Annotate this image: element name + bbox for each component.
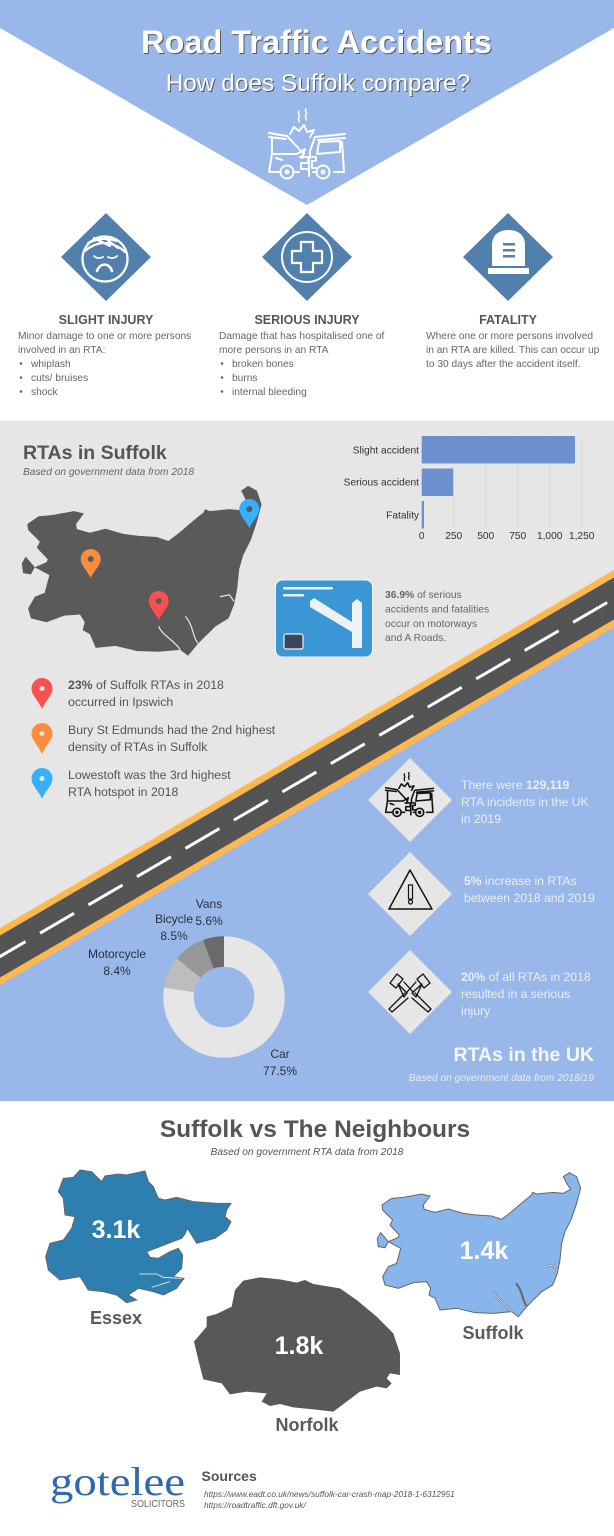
- donut chart: vehicle types: 8.5%: [160, 929, 188, 943]
- road: [0, 570, 614, 985]
- text block: slight injury: shock: [31, 387, 59, 398]
- bar chart: RTAs by severity: 250: [445, 531, 463, 542]
- map: Essex: Essex: [90, 1308, 142, 1328]
- text block: serious injury: burns: [232, 373, 257, 384]
- header banner: [0, 0, 614, 205]
- bar chart: RTAs by severity: Slight accident: [353, 446, 419, 456]
- icon: bandaged face: [61, 213, 151, 301]
- text: UK incident count: in 2019: [461, 812, 501, 826]
- donut chart: vehicle types: [88, 897, 297, 1078]
- text: Ipswich: 23% of Suffolk RTAs in 2018: [68, 678, 224, 692]
- text: Lowestoft: RTA hotspot in 2018: [68, 785, 178, 799]
- text block: slight injury: whiplash: [30, 359, 71, 370]
- icon: warning triangle: [368, 852, 452, 936]
- sources: https://roadtraffic.dft.gov.uk/: [204, 1500, 307, 1510]
- title: Road Traffic Accidents: [141, 24, 492, 60]
- text: serious injury statistic: resulted in a serious: [461, 987, 570, 1001]
- donut chart: vehicle types: Car: [270, 1047, 290, 1061]
- icon: crutches: [368, 950, 452, 1034]
- donut chart: vehicle types: 8.4%: [103, 964, 131, 978]
- logo: Gotelee Solicitors: SOLICITORS: [131, 1499, 185, 1510]
- logo: Gotelee Solicitors: gotelee: [50, 1459, 185, 1504]
- donut chart: vehicle types: 77.5%: [263, 1064, 297, 1078]
- text: increase statistic: between 2018 and 2019: [464, 891, 595, 905]
- text: UK incident count: RTA incidents in the UK: [461, 795, 589, 809]
- text block: fatality: to 30 days after the accident itself.: [426, 359, 581, 370]
- text block: fatality: Where one or more persons involved: [426, 331, 593, 342]
- text: Bury St Edmunds: density of RTAs in Suffolk: [68, 740, 208, 754]
- text block: serious injury: more persons in an RTA: [219, 345, 329, 356]
- map: Essex: [46, 1170, 231, 1328]
- map: Essex: 3.1k: [92, 1216, 140, 1244]
- text block: serious injury: internal bleeding: [232, 387, 307, 398]
- text block: slight injury: cuts/ bruises: [31, 373, 88, 384]
- panel: UK incidents: [368, 758, 595, 1084]
- text: Bury St Edmunds: Bury St Edmunds had the 2nd highest: [68, 723, 276, 737]
- bar chart: RTAs by severity: 1,250: [569, 531, 595, 542]
- map: Suffolk with pins: [22, 486, 262, 656]
- text: neighbours data note: Based on government RTA data from 2018: [211, 1147, 404, 1158]
- text: Ipswich: occurred in Ipswich: [68, 695, 173, 709]
- text: motorway statistic: accidents and fatalities: [385, 604, 489, 616]
- heading: RTAs in the UK: RTAs in the UK: [454, 1044, 594, 1066]
- text block: fatality: in an RTA are killed. This can occur up: [426, 345, 600, 356]
- text: serious injury statistic: injury: [461, 1004, 491, 1018]
- bar chart: RTAs by severity: 500: [477, 531, 495, 542]
- heading: serious injury: SERIOUS INJURY: [254, 313, 360, 327]
- text: increase statistic: 5% increase in RTAs: [464, 874, 577, 888]
- icon: gravestone: [463, 213, 553, 301]
- icon: motorway sign: [276, 580, 372, 657]
- map: Norfolk: 1.8k: [275, 1332, 323, 1360]
- bar chart: RTAs by severity: 750: [509, 531, 527, 542]
- donut chart: vehicle types: Bicycle: [155, 912, 193, 926]
- map: Suffolk: Suffolk: [462, 1323, 524, 1343]
- donut chart: vehicle types: 5.6%: [195, 914, 223, 928]
- icon: red pin: [149, 591, 169, 620]
- legend: Suffolk hotspots: [32, 678, 276, 799]
- text: Suffolk data note: Based on government data from 2018: [23, 467, 194, 478]
- icon: car crash black: [368, 758, 452, 842]
- text block: serious injury: Damage that has hospitalised one of: [219, 331, 385, 342]
- icon: blue legend pin: [32, 768, 52, 799]
- icon: blue pin: [239, 499, 259, 528]
- icon: red legend pin: [32, 678, 52, 709]
- text block: serious injury: [219, 331, 385, 398]
- text: UK data note: Based on government data from 2018/19: [409, 1073, 594, 1084]
- text block: slight injury: involved in an RTA:: [18, 345, 105, 356]
- panel: serious injury: [219, 213, 385, 398]
- bar chart: RTAs by severity: 0: [419, 531, 425, 542]
- panel: slight injury: [18, 213, 191, 398]
- text block: slight injury: Minor damage to one or more persons: [18, 331, 191, 342]
- map: Suffolk: [377, 1173, 581, 1343]
- text: serious injury statistic: 20% of all RTAs in 2018: [461, 970, 591, 984]
- icon: orange pin: [81, 549, 101, 578]
- text block: fatality: [426, 331, 600, 370]
- icon: orange legend pin: [32, 723, 52, 754]
- text: UK incident count: There were 129,119: [461, 778, 569, 792]
- bar chart: RTAs by severity: Serious accident: [344, 478, 419, 488]
- donut chart: vehicle types: Vans: [196, 897, 222, 911]
- heading: Suffolk vs The Neighbours: Suffolk vs The Neighbours: [160, 1116, 470, 1143]
- map: Suffolk: 1.4k: [460, 1237, 508, 1265]
- sources: Sources: [202, 1468, 257, 1484]
- text: Lowestoft: Lowestoft was the 3rd highest: [68, 768, 231, 782]
- panel: blue UK background: [0, 421, 614, 1101]
- sources: [202, 1468, 455, 1510]
- heading: fatality: FATALITY: [479, 313, 538, 327]
- heading: slight injury: SLIGHT INJURY: [59, 313, 154, 327]
- bar chart: RTAs by severity: Fatality: [386, 510, 420, 522]
- text: motorway statistic: and A Roads.: [385, 633, 446, 644]
- icon: car crash white: [269, 109, 345, 178]
- text block: slight injury: [18, 331, 191, 398]
- panel: fatality: [426, 213, 600, 370]
- icon: medical cross: [262, 213, 352, 301]
- text block: serious injury: broken bones: [232, 359, 294, 370]
- text: motorway statistic: occur on motorways: [385, 619, 477, 630]
- bar chart: RTAs by severity: 1,000: [537, 531, 563, 542]
- sources: https://www.eadt.co.uk/news/suffolk-car-crash-map-2018-1-6312951: [204, 1489, 455, 1499]
- panel: grey Suffolk background: [0, 421, 614, 935]
- bar chart: RTAs by severity: [344, 435, 595, 542]
- text: motorway statistic: 36.9% of serious: [385, 590, 462, 601]
- donut chart: vehicle types: Motorcycle: [88, 947, 146, 961]
- map: Norfolk: [194, 1277, 400, 1435]
- map: Norfolk: Norfolk: [276, 1415, 339, 1435]
- heading: RTAs in Suffolk: RTAs in Suffolk: [23, 442, 167, 464]
- subtitle: How does Suffolk compare?: [166, 70, 470, 97]
